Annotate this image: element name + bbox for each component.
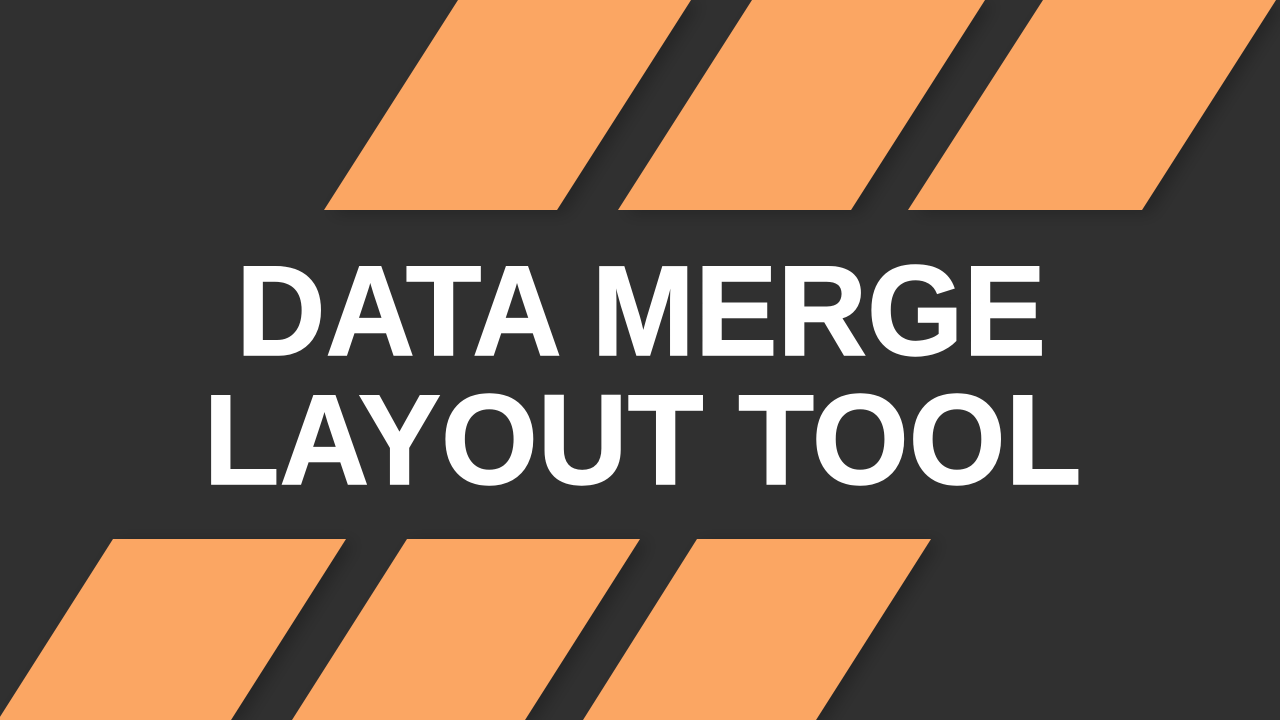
bottom row of orange parallelograms [0,539,931,720]
top parallelogram 3 [908,0,1276,210]
top row of orange parallelograms [324,0,1276,210]
title [204,240,1082,512]
title line 2: LAYOUT TOOL [204,369,1082,512]
bottom parallelogram 2 [292,539,640,720]
bottom parallelogram 3 [583,539,931,720]
top parallelogram 1 [324,0,691,210]
bottom parallelogram 1 [0,539,346,720]
top parallelogram 2 [618,0,985,210]
title line 1: DATA MERGE [236,240,1046,383]
